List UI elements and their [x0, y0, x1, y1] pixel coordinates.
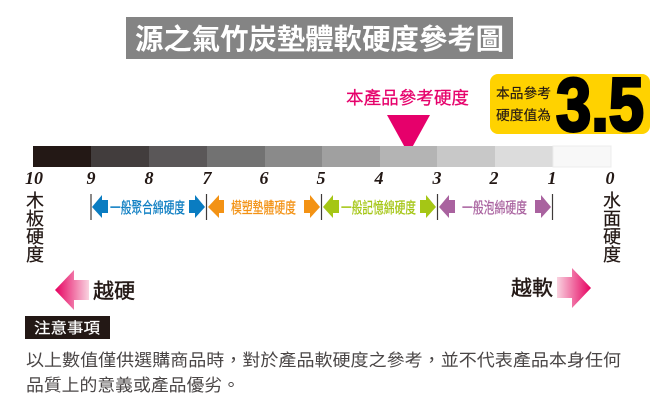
- softer label: 越軟: [511, 277, 553, 300]
- right label: water surface hardness: [603, 191, 621, 265]
- scale numbers: 5: [316, 168, 326, 188]
- notes text: 以上數值僅供選購商品時，對於產品軟硬度之參考，並不代表產品本身任何: [26, 351, 621, 370]
- range: molded mattress: [208, 195, 320, 218]
- range: polymer foam: 一般聚合綿硬度: [110, 199, 185, 217]
- right label: water surface hardness: 硬: [603, 227, 621, 247]
- left label: wood board hardness: 板: [26, 209, 44, 229]
- harder label: 越硬: [93, 280, 135, 303]
- scale numbers: 4: [374, 168, 384, 188]
- badge: hardness value 3.5: 硬度值為: [496, 108, 551, 123]
- range: memory foam: [323, 195, 436, 218]
- notes heading: [25, 316, 110, 339]
- product hardness label: 本產品參考硬度: [346, 88, 469, 108]
- scale numbers: 10: [25, 168, 43, 188]
- scale numbers: 6: [260, 168, 268, 188]
- notes text: [26, 351, 621, 395]
- notes text: 品質上的意義或產品優劣。: [26, 376, 240, 395]
- range: regular foam: [439, 195, 551, 218]
- range: regular foam: 一般泡綿硬度: [462, 199, 527, 217]
- right label: water surface hardness: 面: [603, 209, 621, 229]
- scale numbers: 7: [202, 168, 212, 188]
- left label: wood board hardness: 硬: [26, 227, 44, 247]
- range: polymer foam: [92, 195, 205, 218]
- notes heading: 注意事項: [34, 319, 100, 337]
- right label: water surface hardness: 度: [603, 245, 621, 265]
- scale numbers: [25, 168, 614, 188]
- softer arrow: [557, 268, 591, 308]
- badge: hardness value 3.5: 本品參考: [496, 86, 551, 101]
- scale numbers: 1: [548, 168, 556, 188]
- scale numbers: 2: [488, 168, 498, 188]
- range ticks: [91, 194, 552, 220]
- badge: hardness value 3.5: [490, 62, 650, 146]
- left label: wood board hardness: 度: [26, 245, 44, 265]
- hardness gradient scale bar: [33, 146, 611, 167]
- right label: water surface hardness: 水: [603, 191, 621, 211]
- left label: wood board hardness: [26, 191, 44, 265]
- scale numbers: 9: [86, 168, 96, 188]
- pointer triangle: [387, 115, 430, 154]
- scale numbers: 0: [606, 168, 614, 188]
- title: 源之氣竹炭墊體軟硬度參考圖: [135, 24, 504, 56]
- range: memory foam: 一般記憶綿硬度: [341, 199, 416, 217]
- left label: wood board hardness: 木: [26, 191, 44, 211]
- harder arrow: [55, 270, 89, 310]
- range: molded mattress: 模塑墊體硬度: [231, 199, 296, 217]
- scale numbers: 3: [432, 168, 442, 188]
- scale numbers: 8: [144, 168, 154, 188]
